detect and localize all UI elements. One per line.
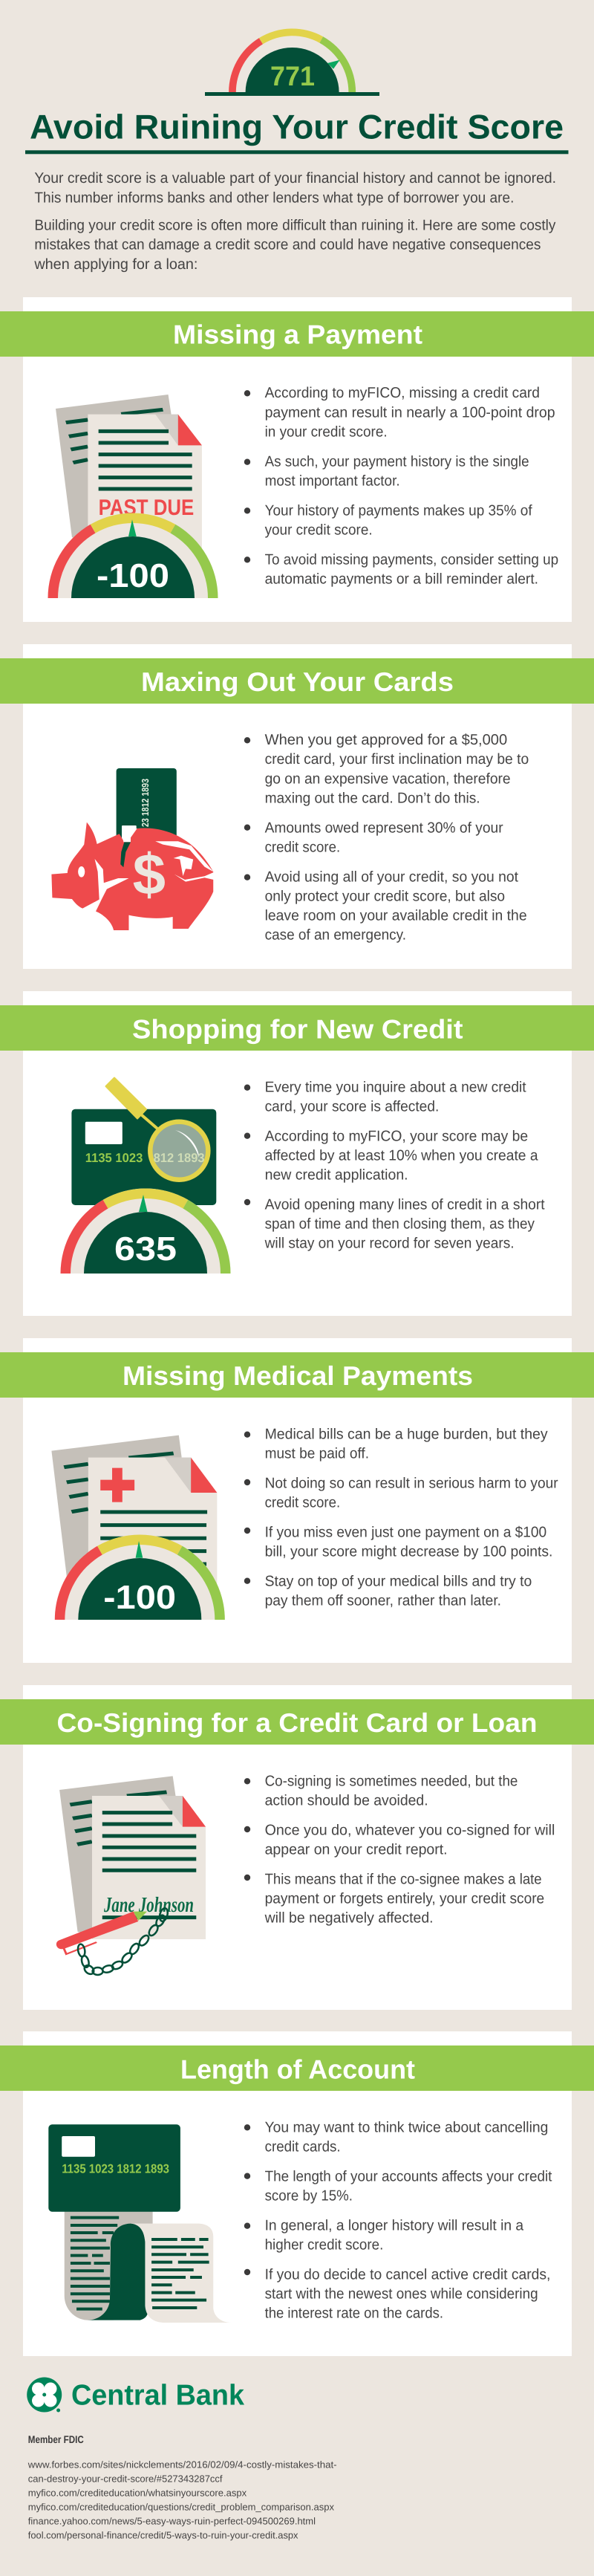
bullet list: payment or forgets entirely, your credit score [265,1891,544,1907]
intro text: when applying for a loan: [33,256,198,273]
icon: credit card with long receipt [48,2124,231,2323]
bullet list: start with the newest ones while considering [265,2285,538,2302]
icon: credit card under magnifying glass: 1135 1023 [85,1151,143,1165]
bullet list: action should be avoided. [265,1792,428,1808]
sources [27,2459,337,2541]
title: Avoid Ruining Your Credit Score [30,108,564,146]
gauge: minus 100: -100 [103,1578,176,1616]
sources: myfico.com/crediteducation/questions/credit_problem_comparison.aspx [28,2502,334,2513]
bullet list: As such, your payment history is the single [265,453,529,470]
intro text [33,170,556,273]
gauge: minus 100: -100 [97,557,169,594]
bullet list: will stay on your record for seven years. [264,1235,515,1251]
bullet list: appear on your credit report. [265,1842,448,1858]
bullet list: Co-signing is sometimes needed, but the [265,1773,518,1789]
bullet list: Not doing so can result in serious harm to your [265,1476,558,1492]
bullet list: most important factor. [265,473,400,489]
sources: myfico.com/crediteducation/whatsinyourscore.aspx [28,2488,247,2499]
panel: maxing out your cards [0,644,594,969]
icon: credit card entering broken piggy bank [51,768,214,930]
intro text: This number informs banks and other lenders what type of borrower you are. [34,190,514,207]
bullet list: new credit application. [265,1167,408,1183]
bullet list: The length of your accounts affects your credit [265,2168,552,2184]
bullet list: in your credit score. [265,424,388,440]
bullet list: bill, your score might decrease by 100 points. [265,1543,552,1560]
bullet list: Avoid opening many lines of credit in a short [265,1196,545,1213]
bullet list: automatic payments or a bill reminder alert. [265,571,538,587]
signature: Jane Johnson [103,1893,194,1917]
bullet list: higher credit score. [265,2236,383,2253]
bullet list: In general, a longer history will result in a [265,2217,524,2233]
header gauge icon: 771 [270,61,315,91]
icon: credit card with long receipt: 1135 1023 1812 1893 [62,2161,169,2176]
intro text: Your credit score is a valuable part of your financial history and cannot be ignored. [34,170,556,186]
bullet list: You may want to think twice about cancelling [265,2119,548,2135]
bullet list: Avoid using all of your credit, so you not [265,869,518,885]
bullet list: Amounts owed represent 30% of your [265,820,503,836]
intro text: Building your credit score is often more difficult than ruining it. Here are some costly [34,217,555,233]
icon: credit card entering broken piggy bank: $ [133,841,166,906]
icon: past due bills [56,395,202,570]
bullet list: This means that if the co-signee makes a late [265,1872,542,1888]
bullet list: If you miss even just one payment on a $100 [265,1524,546,1540]
bullet list: leave room on your available credit in the [265,907,527,924]
gauge: 635: 635 [114,1230,177,1268]
heading: shopping for new credit: Shopping for New Credit [132,1013,463,1044]
bullet list [244,1773,555,1927]
icon: credit card under magnifying glass [71,1077,216,1205]
bullet list [244,1427,558,1609]
bullet list: your credit score. [265,522,373,538]
panel: co-signing [0,1685,594,2010]
bullet list: credit score. [265,1494,340,1511]
logo: Central Bank: Central Bank [71,2380,244,2412]
bullet list: affected by at least 10% when you create a [265,1147,538,1164]
panel: length of account [0,2031,594,2356]
bullet list: Medical bills can be a huge burden, but they [265,1427,548,1443]
bullet list: According to myFICO, your score may be [265,1128,528,1144]
intro text: mistakes that can damage a credit score and could have negative consequences [34,236,541,253]
icon: credit card under magnifying glass: 812 1893 [154,1151,205,1165]
bullet list: payment can result in nearly a 100-point drop [265,404,555,421]
member FDIC: Member FDIC [28,2433,84,2445]
bullet list: only protect your credit score, but also [265,888,505,904]
bullet list: card, your score is affected. [265,1098,439,1115]
sources: can-destroy-your-credit-score/#527343287ccf [28,2473,223,2485]
stamp: past due: PAST DUE [99,496,194,520]
bullet list [244,732,529,943]
bullet list [244,385,558,587]
heading: length of account: Length of Account [180,2054,415,2084]
panel: missing a payment [0,297,594,622]
bullet list: Every time you inquire about a new credit [265,1079,526,1095]
heading: co-signing: Co-Signing for a Credit Card or Loan [56,1707,537,1738]
sources: fool.com/personal-finance/credit/5-ways-to-ruin-your-credit.aspx [28,2530,298,2541]
gauge: 635 [61,1188,230,1274]
bullet list: the interest rate on the cards. [265,2305,443,2321]
bullet list: When you get approved for a $5,000 [265,732,507,748]
bullet list: will be negatively affected. [264,1910,434,1927]
panel: missing medical payments [0,1338,594,1663]
bullet list: credit score. [265,839,340,855]
icon: medical bills [51,1435,217,1592]
bullet list [244,1079,545,1251]
bullet list: span of time and then closing them, as they [265,1216,535,1232]
icon: signed document [59,1776,206,1939]
icon: pen on chain [56,1907,169,1976]
bullet list: Once you do, whatever you co-signed for will [265,1822,555,1838]
bullet list: go on an expensive vacation, therefore [265,770,511,787]
bullet list: If you do decide to cancel active credit cards, [265,2266,550,2283]
bullet list: case of an emergency. [265,927,406,943]
bullet list: credit cards. [265,2138,341,2155]
bullet list: Stay on top of your medical bills and try to [265,1573,532,1589]
header gauge icon [205,28,379,96]
bullet list [244,2119,552,2321]
gauge: minus 100 [55,1534,225,1620]
bullet list: To avoid missing payments, consider setting up [265,551,558,568]
bullet list: According to myFICO, missing a credit card [265,385,540,401]
bullet list: credit card, your first inclination may be to [265,751,529,768]
icon: credit card entering broken piggy bank: 23 1812 1893 [140,779,151,827]
heading: missing a payment: Missing a Payment [173,319,422,350]
gauge: minus 100 [48,513,218,598]
heading: maxing out your cards: Maxing Out Your Cards [141,666,454,697]
sources: www.forbes.com/sites/nickclements/2016/02/09/4-costly-mistakes-that- [27,2459,337,2470]
sources: finance.yahoo.com/news/5-easy-ways-ruin-perfect-094500269.html [28,2516,316,2527]
bullet list: maxing out the card. Don’t do this. [265,790,480,806]
bullet list: score by 15%. [265,2187,353,2204]
bullet list: must be paid off. [265,1446,369,1462]
bullet list: pay them off sooner, rather than later. [265,1592,501,1609]
heading: missing medical payments: Missing Medical Payments [123,1360,473,1391]
bullet list: Your history of payments makes up 35% of [265,502,532,519]
panel: shopping for new credit [0,991,594,1316]
